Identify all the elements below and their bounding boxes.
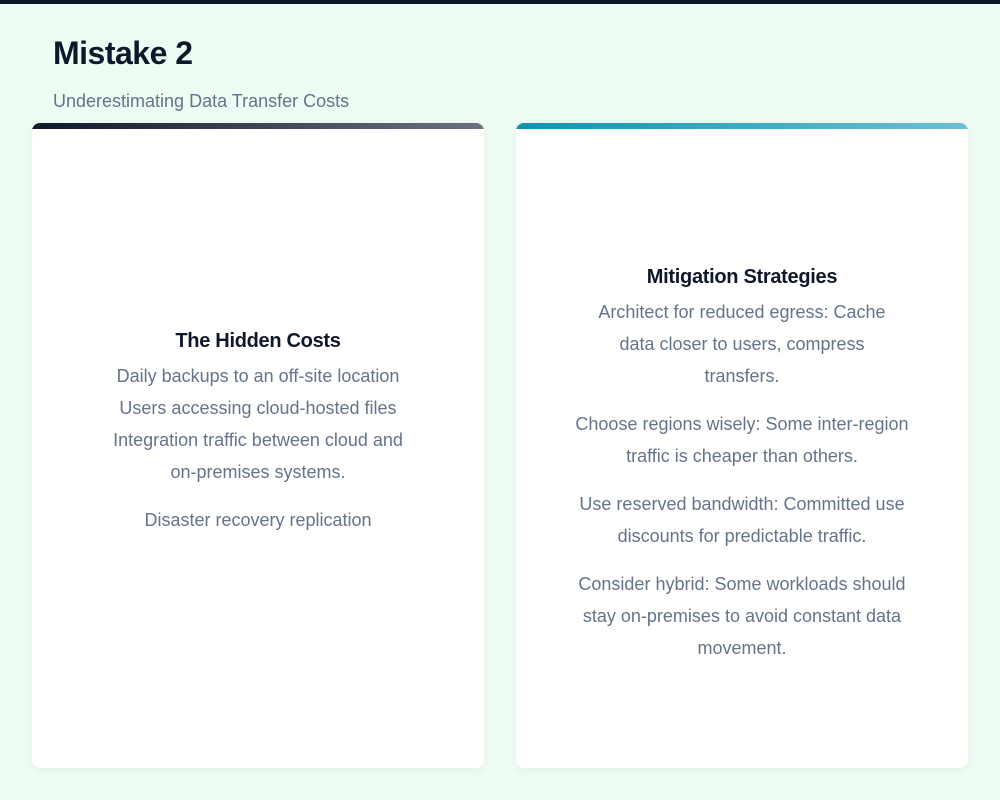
text block: regions: traffic is cheaper than others. — [626, 446, 858, 466]
text block: cost list: Daily backups to an off-site location — [117, 366, 399, 386]
subtitle: Underestimating Data Transfer Costs — [53, 91, 349, 111]
text block: bandwidth: discounts for predictable traffic. — [618, 526, 866, 546]
panel: hidden costs — [32, 123, 484, 768]
title: Mistake 2 — [53, 35, 193, 71]
text block: hybrid: stay on-premises to avoid constant data — [583, 606, 901, 626]
text block: hybrid — [578, 574, 906, 658]
text block: egress — [598, 302, 886, 386]
text block: bandwidth: Use reserved bandwidth: Committed use — [579, 494, 905, 514]
text block: regions: Choose regions wisely: Some inter-region — [575, 414, 909, 434]
text block: cost list: on-premises systems. — [170, 462, 346, 482]
panel: mitigation strategies — [516, 123, 968, 768]
text block: hybrid: movement. — [697, 638, 787, 658]
text block: cost list: Users accessing cloud-hosted files — [119, 398, 397, 418]
text block: egress: data closer to users, compress — [619, 334, 865, 354]
text block: bandwidth — [579, 494, 905, 546]
text block: egress: Architect for reduced egress: Cache — [598, 302, 886, 322]
text block: egress: transfers. — [704, 366, 780, 386]
text block: cost list — [113, 366, 403, 482]
text block: cost list: Integration traffic between cloud and — [113, 430, 403, 450]
text block: disaster recovery: Disaster recovery replication — [144, 510, 372, 530]
heading: hidden costs: The Hidden Costs — [175, 330, 341, 352]
heading: mitigation: Mitigation Strategies — [647, 266, 837, 288]
text block: hybrid: Consider hybrid: Some workloads should — [578, 574, 906, 594]
text block: regions — [575, 414, 909, 466]
